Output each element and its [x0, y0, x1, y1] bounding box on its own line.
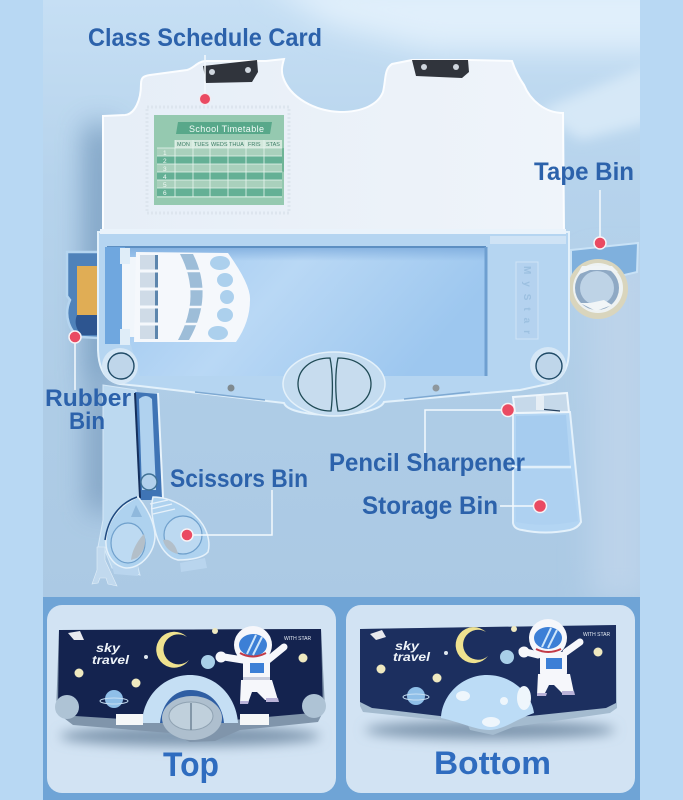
label: scissors bin: Scissors Bin — [170, 465, 308, 493]
timetable card: 2 — [163, 158, 167, 165]
shelf ridges — [195, 392, 265, 400]
bottom band — [43, 597, 640, 800]
eraser — [77, 266, 100, 315]
planet and stars: bottom — [370, 626, 602, 705]
panel: tape bin — [568, 243, 638, 319]
label: pencil sharpener: Pencil Sharpener — [329, 449, 525, 477]
moon: top — [156, 632, 189, 668]
bin body — [98, 385, 140, 575]
panel: scissors bin — [92, 385, 209, 586]
label: class schedule card: Class Schedule Card — [88, 24, 322, 52]
timetable rows — [157, 148, 282, 196]
label: top: Top — [163, 746, 219, 784]
scissors blade — [139, 396, 156, 490]
ruler foot — [92, 547, 117, 586]
label: rubber bin — [45, 385, 131, 435]
planet and stars: top — [68, 628, 308, 708]
sky travel text: bottom: travel — [393, 650, 431, 664]
oval button — [283, 352, 385, 416]
screws — [228, 384, 234, 392]
callout: storage bin — [500, 500, 546, 512]
label: tape bin: Tape Bin — [534, 158, 634, 186]
tray recess — [107, 247, 486, 376]
timetable card: 6 — [163, 190, 167, 197]
callout: rubber bin — [69, 331, 81, 390]
dial wheel — [120, 248, 250, 345]
panel: class schedule card — [103, 59, 564, 234]
timetable card: School Timetable — [189, 124, 264, 134]
card stitching — [147, 107, 289, 213]
timetable card: 5 — [163, 182, 167, 189]
sky travel text: bottom: sky — [395, 639, 421, 653]
sky travel text: top: sky — [96, 641, 122, 655]
callout: class schedule card — [200, 55, 210, 104]
callout: scissors bin — [181, 490, 272, 541]
timetable card: TUES — [194, 142, 209, 148]
moon: bottom — [456, 627, 488, 663]
tagline: top: WITH STAR — [284, 636, 312, 642]
timetable card: MON — [177, 142, 190, 148]
timetable card: THUA — [229, 142, 244, 148]
grip ribs — [150, 500, 175, 514]
pencil sharpener — [513, 393, 569, 413]
timetable card: 4 — [163, 174, 167, 181]
dial: top — [162, 696, 222, 740]
panel: storage bin and sharpener — [513, 393, 581, 532]
tabs — [112, 565, 138, 576]
label: rubber bin: Rubber — [45, 385, 131, 412]
timetable card: 3 — [163, 166, 167, 173]
panel: rubber bin — [67, 252, 100, 338]
clip: right — [412, 60, 469, 78]
panel: case body: MyStar — [521, 266, 532, 334]
top rail — [490, 236, 566, 244]
bolt: left — [102, 348, 138, 384]
label: rubber bin: Bin — [69, 408, 105, 435]
sky travel text: top — [92, 641, 130, 667]
panel: case body — [98, 229, 569, 416]
case drop shadow — [85, 125, 116, 512]
astronaut: bottom — [518, 619, 580, 696]
blade slot — [135, 392, 163, 500]
callout: tape bin — [594, 190, 606, 249]
clip: left — [203, 60, 258, 83]
bolt: right — [530, 347, 566, 383]
panel: top view — [47, 605, 336, 793]
sky travel text: bottom — [393, 639, 431, 664]
panel: bottom view — [346, 605, 635, 793]
white tabs: top — [116, 714, 143, 725]
scissors handle: left — [106, 497, 155, 568]
dome: top — [142, 675, 238, 723]
astronaut: top — [216, 626, 284, 704]
callout: pencil sharpener — [425, 404, 514, 455]
embossed panel — [516, 262, 538, 339]
tagline: bottom: WITH STAR — [583, 632, 611, 638]
case: bottom — [360, 625, 617, 735]
tape roll — [568, 259, 628, 319]
timetable card: FRIS — [248, 142, 261, 148]
sky travel text: top: travel — [92, 653, 130, 667]
timetable card: WEDS — [211, 142, 228, 148]
timetable card: 1 — [163, 150, 167, 157]
bolts: top — [55, 695, 79, 719]
timetable card: STAS — [266, 142, 280, 148]
timetable card — [154, 115, 284, 205]
scissors handle: right — [152, 497, 209, 560]
label: bottom: Bottom — [434, 745, 551, 781]
storage tray — [513, 412, 581, 532]
label: storage bin: Storage Bin — [362, 492, 498, 520]
case: top — [56, 629, 325, 742]
dome: bottom — [441, 675, 534, 730]
